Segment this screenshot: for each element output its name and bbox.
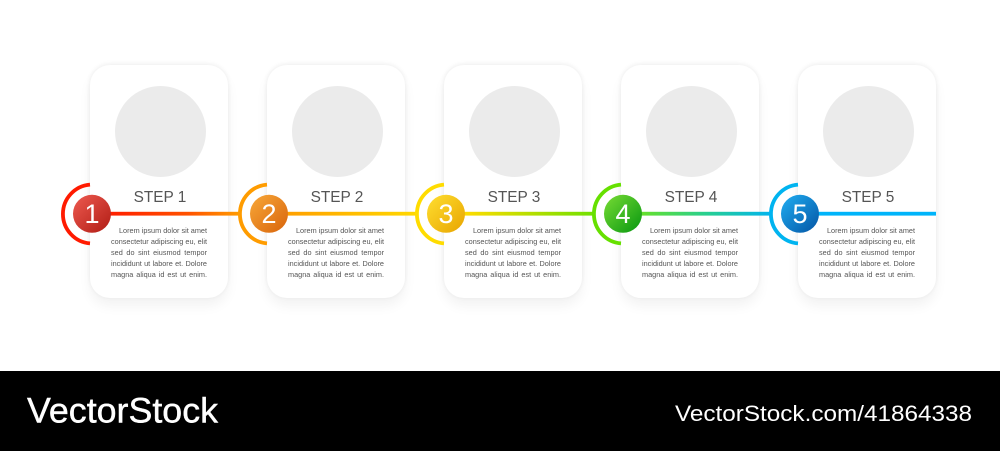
image id text: VectorStock.com/41864338 [675,401,972,426]
image placeholder 4 [646,86,737,177]
image placeholder 3 [469,86,560,177]
text block 3: Lorem ipsum dolor sit amet [473,226,561,235]
timeline marker 5: 5 [792,199,808,229]
text block 4: magna aliqua id est ut enim. [642,270,738,279]
text block 5: consectetur adipiscing eu, elit [819,237,915,246]
heading: step 4: STEP 4 [665,189,717,206]
text block 5: incididunt ut labore et. Dolore [819,259,915,268]
text block 2: incididunt ut labore et. Dolore [288,259,384,268]
text block 2: Lorem ipsum dolor sit amet [296,226,384,235]
text block 1: Lorem ipsum dolor sit amet [119,226,207,235]
text block 2: magna aliqua id est ut enim. [288,270,384,279]
heading: step 5: STEP 5 [842,189,894,206]
text block 1: incididunt ut labore et. Dolore [111,259,207,268]
text block 4: sed do sint eiusmod tempor [642,248,738,257]
text block 4: consectetur adipiscing eu, elit [642,237,738,246]
text block 1 [111,226,207,279]
card 1 [90,65,228,298]
text block 5: magna aliqua id est ut enim. [819,270,915,279]
brand logo text: VectorStock [27,392,219,430]
text block 1: consectetur adipiscing eu, elit [111,237,207,246]
text block 5 [819,226,915,279]
text block 3: magna aliqua id est ut enim. [465,270,561,279]
heading: step 1: STEP 1 [134,189,186,206]
card 3 [444,65,582,298]
heading: step 2: STEP 2 [311,189,363,206]
text block 1: sed do sint eiusmod tempor [111,248,207,257]
text block 2 [288,226,384,279]
card 5 [798,65,936,298]
image placeholder 1 [115,86,206,177]
text block 4: Lorem ipsum dolor sit amet [650,226,738,235]
text block 3 [465,226,561,279]
text block 4: incididunt ut labore et. Dolore [642,259,738,268]
timeline marker 1: 1 [84,199,100,229]
heading: step 3: STEP 3 [488,189,540,206]
text block 3: sed do sint eiusmod tempor [465,248,561,257]
timeline marker 2: 2 [261,199,277,229]
image placeholder 2 [292,86,383,177]
card 4 [621,65,759,298]
text block 5: Lorem ipsum dolor sit amet [827,226,915,235]
card 2 [267,65,405,298]
text block 3: consectetur adipiscing eu, elit [465,237,561,246]
text block 2: consectetur adipiscing eu, elit [288,237,384,246]
watermark footer bar [0,371,1000,451]
text block 3: incididunt ut labore et. Dolore [465,259,561,268]
text block 1: magna aliqua id est ut enim. [111,270,207,279]
text block 2: sed do sint eiusmod tempor [288,248,384,257]
timeline marker 4: 4 [615,199,631,229]
text block 5: sed do sint eiusmod tempor [819,248,915,257]
image placeholder 5 [823,86,914,177]
timeline marker 3: 3 [438,199,454,229]
text block 4 [642,226,738,279]
